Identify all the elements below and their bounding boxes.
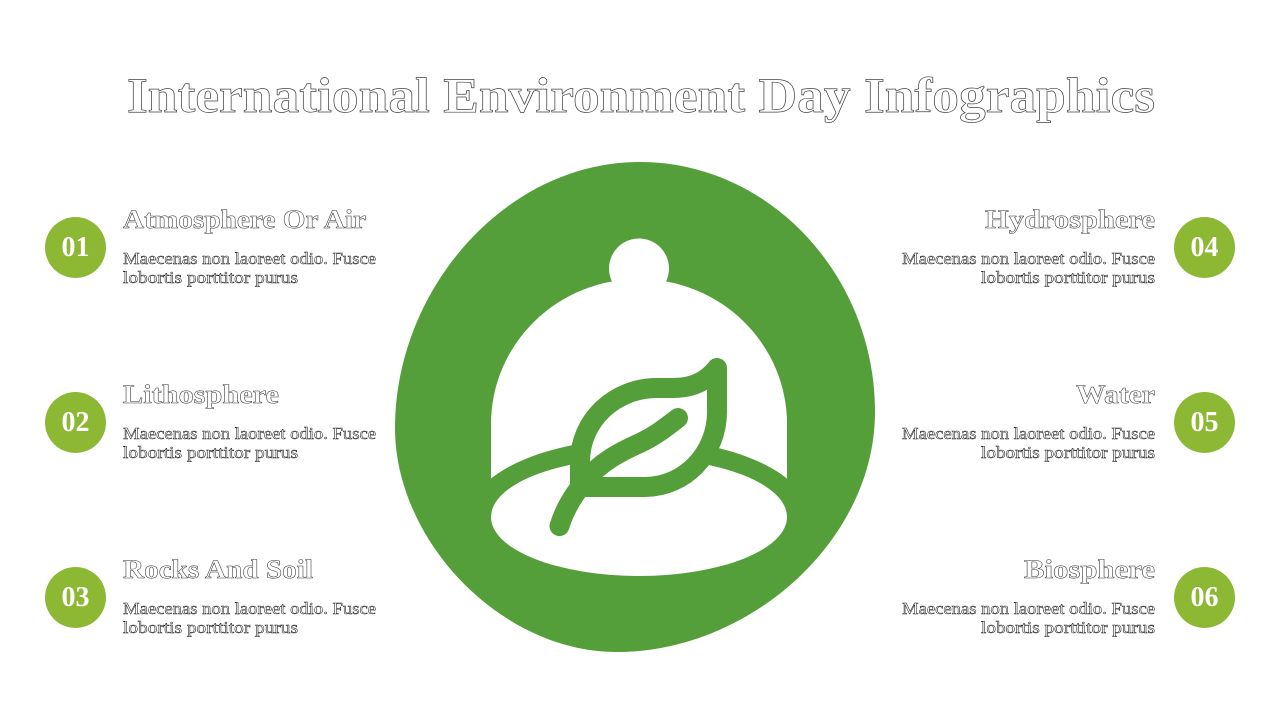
leaf outline: [580, 368, 717, 487]
number badge 02: [45, 392, 106, 453]
item 03: [45, 555, 376, 637]
heading: Rocks And Soil: Rocks And Soil: [123, 555, 313, 584]
cloche dome: [491, 279, 787, 500]
item 04: [902, 205, 1235, 287]
body text line 1: Maecenas non laoreet odio. Fusce: [902, 249, 1155, 268]
body text line 2: lobortis porttitor purus: [981, 618, 1155, 637]
heading: Atmosphere Or Air: Atmosphere Or Air: [123, 205, 366, 234]
item 06: [902, 555, 1235, 637]
leaf stem: [560, 418, 678, 526]
number badge 06: [1174, 567, 1235, 628]
heading: Water: Water: [1076, 380, 1155, 409]
number 04: 04: [1190, 232, 1218, 263]
number 02: 02: [62, 407, 90, 438]
item 05: [902, 380, 1235, 462]
item 02: [45, 380, 376, 462]
central illustration: cloche with leaf: [395, 162, 875, 652]
plate: [491, 458, 787, 576]
cloche knob: [609, 238, 669, 298]
heading: Biosphere: Biosphere: [1024, 555, 1155, 584]
body text line 2: lobortis porttitor purus: [981, 443, 1155, 462]
number badge 04: [1174, 217, 1235, 278]
cloche rim band: [469, 439, 809, 595]
body text line 2: lobortis porttitor purus: [123, 268, 298, 287]
body text line 2: lobortis porttitor purus: [123, 618, 298, 637]
number badge 05: [1174, 392, 1235, 453]
title: International Environment Day Infographics: [127, 67, 1155, 123]
heading: Hydrosphere: Hydrosphere: [985, 205, 1155, 234]
number 01: 01: [62, 232, 90, 263]
body text line 2: lobortis porttitor purus: [123, 443, 298, 462]
item 01: [45, 205, 376, 287]
body text line 1: Maecenas non laoreet odio. Fusce: [123, 599, 376, 618]
number badge 01: [45, 217, 106, 278]
body text line 1: Maecenas non laoreet odio. Fusce: [902, 599, 1155, 618]
number 05: 05: [1190, 407, 1218, 438]
body text line 1: Maecenas non laoreet odio. Fusce: [123, 424, 376, 443]
body text line 2: lobortis porttitor purus: [981, 268, 1155, 287]
body text line 1: Maecenas non laoreet odio. Fusce: [902, 424, 1155, 443]
number 03: 03: [62, 582, 90, 613]
number 06: 06: [1190, 582, 1218, 613]
heading: Lithosphere: Lithosphere: [123, 380, 279, 409]
body text line 1: Maecenas non laoreet odio. Fusce: [123, 249, 376, 268]
number badge 03: [45, 567, 106, 628]
green blob background: [395, 162, 875, 652]
